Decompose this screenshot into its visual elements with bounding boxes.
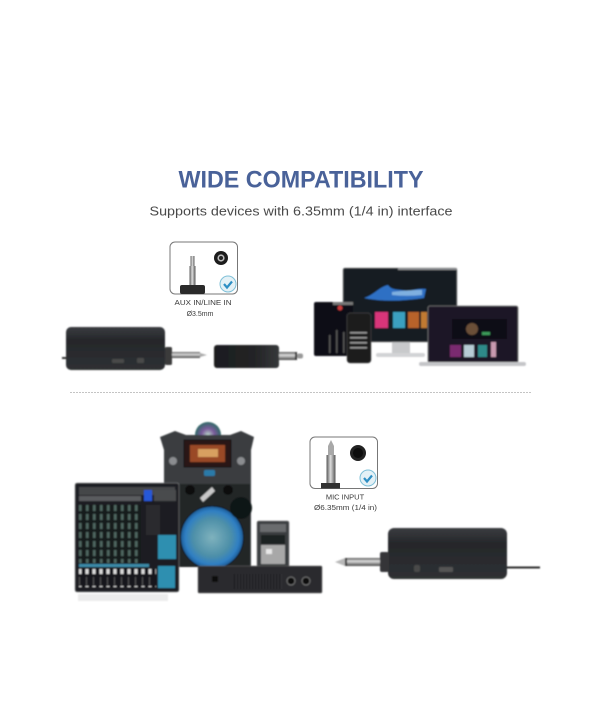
icon: 3.5mm socket <box>214 251 228 265</box>
laptop <box>419 306 526 366</box>
subtitle: Supports devices with 6.35mm (1/4 in) interface <box>150 204 452 218</box>
small mixer <box>257 521 289 567</box>
aux label <box>174 300 232 318</box>
panel: mic input icon card <box>310 437 378 488</box>
wireless receiver with 6.35mm plug <box>62 327 207 370</box>
panel: aux input icon card <box>170 242 238 294</box>
karaoke machine <box>160 422 254 569</box>
icon: 6.35mm jack <box>321 440 340 488</box>
6.35mm to 3.5mm adapter <box>214 345 303 368</box>
dashed divider <box>70 392 532 394</box>
power amplifier <box>198 566 322 593</box>
tablet <box>314 302 353 356</box>
monitor <box>343 268 457 357</box>
mic input label <box>314 492 378 512</box>
mixer <box>75 483 179 601</box>
audio equipment group <box>75 422 322 601</box>
mic input label: Ø6.35mm (1/4 in) <box>314 503 378 512</box>
mic input label: MIC INPUT <box>326 492 365 502</box>
title: WIDE COMPATIBILITY <box>178 166 424 194</box>
icon: check badge <box>220 276 236 292</box>
icon: 6.35mm socket <box>350 445 366 461</box>
aux label: Ø3.5mm <box>187 311 214 318</box>
devices: monitor, tablet, phone, laptop <box>314 268 526 366</box>
phone <box>347 313 371 363</box>
icon: 3.5mm jack <box>180 256 205 294</box>
aux label: AUX IN/LINE IN <box>174 300 232 307</box>
icon: check badge <box>360 470 376 486</box>
wireless receiver plugged into mic input <box>335 528 540 579</box>
